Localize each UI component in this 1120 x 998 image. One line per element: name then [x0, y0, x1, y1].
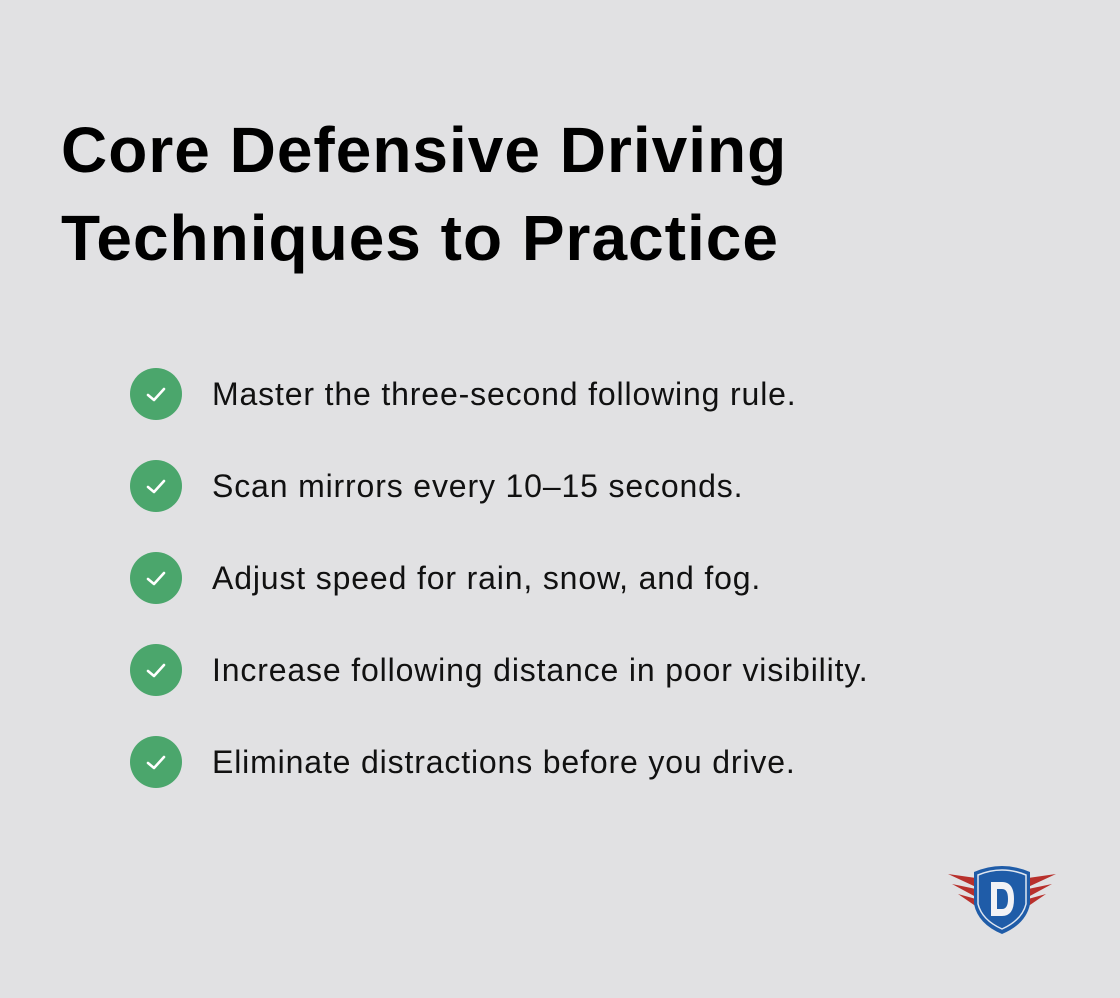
logo	[948, 866, 1056, 934]
item 2	[130, 460, 743, 512]
text: Adjust speed for rain, snow, and fog.	[212, 560, 761, 596]
text: Eliminate distractions before you drive.	[212, 744, 796, 780]
icon: check	[130, 552, 182, 604]
item 4	[130, 644, 869, 696]
text: Scan mirrors every 10–15 seconds.	[212, 468, 743, 504]
icon: check	[130, 736, 182, 788]
text: Master the three-second following rule.	[212, 376, 797, 412]
item 1	[130, 368, 797, 420]
text: Increase following distance in poor visibility.	[212, 652, 869, 688]
icon: check	[130, 368, 182, 420]
title	[61, 114, 787, 274]
title: Techniques to Practice	[61, 202, 779, 274]
title: Core Defensive Driving	[61, 114, 787, 186]
item 3	[130, 552, 761, 604]
icon: check	[130, 460, 182, 512]
icon: check	[130, 644, 182, 696]
item 5	[130, 736, 796, 788]
